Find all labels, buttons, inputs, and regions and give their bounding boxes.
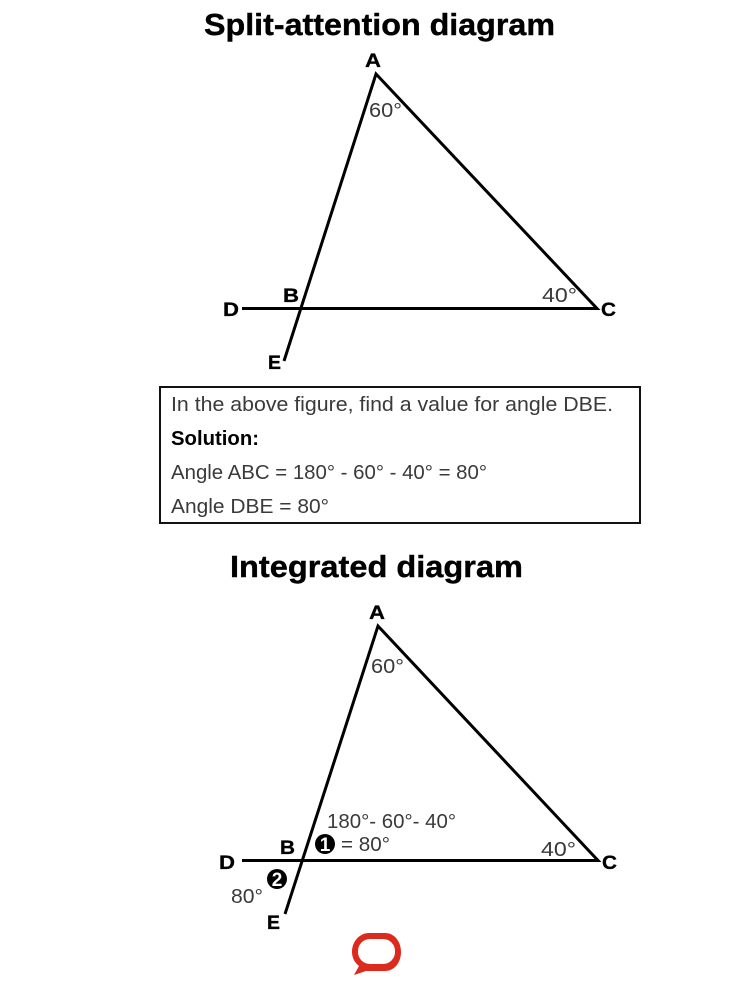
problem and solution text box: Angle ABC = 180° - 60° - 40° = 80° [171,461,487,484]
integrated geometry figure: A [369,603,385,624]
title: split-attention diagram: Split-attention diagram [204,7,555,42]
problem and solution text box: In the above figure, find a value for angle DBE. [171,393,613,416]
step marker 2: 2 [272,870,282,891]
integrated geometry figure: 60° [371,656,404,678]
problem and solution text box: Angle DBE = 80° [171,495,329,518]
integrated geometry figure: 80° [231,886,263,908]
step marker 1: 1 [320,835,331,856]
split-attention geometry figure: C [601,300,616,321]
split-attention geometry figure: E [268,353,281,374]
title: integrated diagram: Integrated diagram [230,549,523,584]
integrated geometry figure: 40° [541,839,576,861]
icon: red speech bubble logo [352,933,401,975]
integrated geometry figure: E [267,913,280,934]
split-attention geometry figure: B [283,286,299,307]
step marker 1 [315,834,335,856]
integrated geometry figure: C [602,853,617,874]
split-attention geometry figure: 60° [369,100,402,122]
integrated geometry figure [219,603,617,934]
split-attention geometry figure [223,51,616,374]
split-attention geometry figure: 40° [542,285,577,307]
problem and solution text box: Solution: [171,427,259,450]
problem and solution text box [160,387,640,523]
integrated geometry figure: = 80° [341,834,390,856]
step marker 2 [267,869,287,891]
split-attention geometry figure: A [365,51,381,72]
integrated geometry figure: D [219,853,235,874]
integrated geometry figure: B [280,838,295,859]
split-attention geometry figure: D [223,300,239,321]
integrated geometry figure: 180°- 60°- 40° [327,811,456,833]
